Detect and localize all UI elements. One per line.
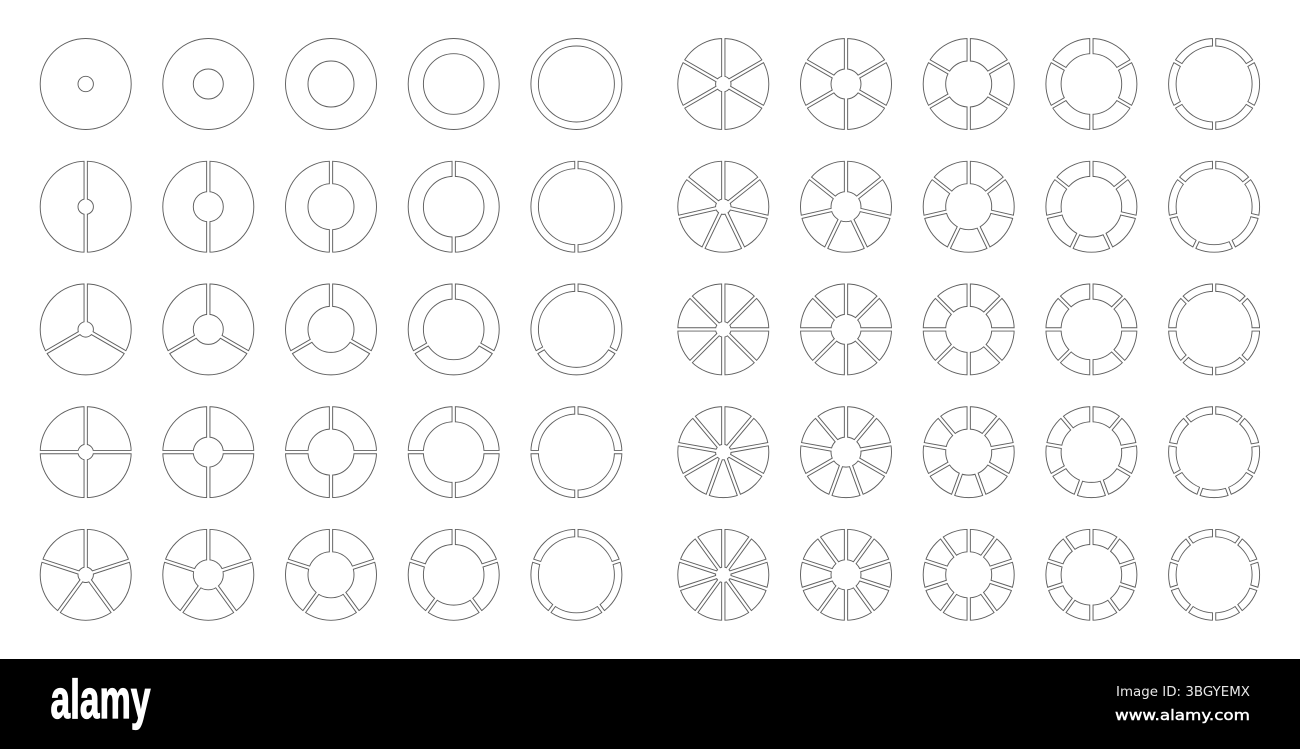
ring: 9 segments, medium hole — [922, 405, 1015, 498]
ring: 8 segments, smallest hole — [676, 282, 770, 376]
ring: 4 segments, medium hole — [284, 405, 378, 499]
ring: 3 segments, large hole — [408, 282, 499, 375]
ring: 1 segment, smallest hole — [40, 38, 131, 130]
ring: 6 segments, small hole — [800, 37, 892, 131]
ring: 7 segments, smallest hole — [677, 160, 769, 252]
ring: 10 segments, smallest hole — [678, 528, 769, 622]
ring: 9 segments, small hole — [800, 405, 892, 498]
ring: 7 segments, medium hole — [923, 160, 1015, 252]
logo: alamy wordmark: alamy — [50, 668, 151, 730]
ring: 8 segments, medium hole — [922, 282, 1016, 376]
ring: 2 segments, small hole — [163, 160, 254, 254]
image id text: Image ID: 3BGYEMX — [1116, 685, 1250, 700]
ring: 6 segments, smallest hole — [678, 37, 769, 131]
panel: right ring grid, 6 to 10 segments — [676, 37, 1261, 622]
ring: 8 segments, small hole — [799, 282, 893, 376]
footer bar — [0, 659, 1300, 749]
ring: 9 segments, smallest hole — [677, 405, 770, 498]
ring: 5 segments, small hole — [163, 528, 254, 620]
ring: 7 segments, largest hole — [1168, 160, 1260, 252]
ring: 5 segments, medium hole — [286, 528, 376, 620]
ring: 7 segments, large hole — [1046, 160, 1137, 252]
ring: 10 segments, largest hole — [1169, 528, 1260, 622]
ring: 7 segments, small hole — [800, 160, 892, 252]
ring: 8 segments, largest hole — [1167, 282, 1261, 376]
ring: 4 segments, large hole — [407, 405, 501, 499]
ring: 3 segments, largest hole — [531, 282, 622, 375]
ring: 1 segment, medium hole — [286, 38, 376, 130]
ring: 9 segments, large hole — [1045, 405, 1138, 498]
ring: 3 segments, medium hole — [286, 282, 376, 375]
website url text: www.alamy.com — [1115, 708, 1250, 724]
ring: 10 segments, large hole — [1046, 528, 1137, 622]
ring: 1 segment, small hole — [163, 38, 254, 130]
ring: 3 segments, smallest hole — [40, 282, 131, 375]
ring: 1 segment, largest hole — [531, 38, 622, 130]
ring: 4 segments, largest hole — [529, 405, 623, 499]
ring: 5 segments, smallest hole — [40, 528, 131, 620]
ring: 2 segments, large hole — [408, 160, 499, 254]
ring: 4 segments, small hole — [161, 405, 255, 499]
ring: 6 segments, largest hole — [1169, 37, 1260, 131]
ring: 4 segments, smallest hole — [39, 405, 133, 499]
panel: left ring grid, 1 to 5 segments — [39, 38, 623, 620]
ring: 6 segments, large hole — [1046, 37, 1137, 131]
ring: 9 segments, largest hole — [1168, 405, 1260, 498]
ring: 2 segments, smallest hole — [40, 160, 131, 254]
ring: 5 segments, largest hole — [531, 528, 622, 620]
ring: 6 segments, medium hole — [923, 37, 1014, 131]
ring: 3 segments, small hole — [163, 282, 254, 375]
ring: 1 segment, large hole — [408, 38, 499, 130]
ring: 2 segments, largest hole — [531, 160, 622, 254]
ring: 10 segments, small hole — [800, 528, 892, 622]
ring: 5 segments, large hole — [408, 528, 499, 620]
ring: 2 segments, medium hole — [286, 160, 376, 254]
ring: 10 segments, medium hole — [923, 528, 1014, 622]
ring: 8 segments, large hole — [1044, 282, 1138, 376]
